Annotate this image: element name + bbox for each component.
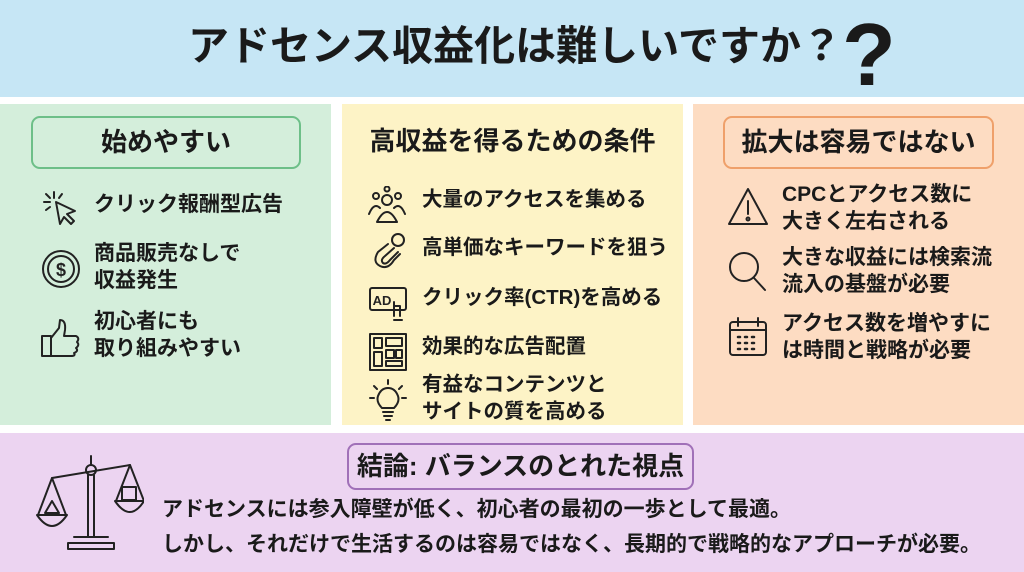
heading: not easy — [723, 116, 994, 169]
heading: easy to start: 始めやすい — [101, 127, 231, 157]
icon: question mark: ? — [842, 5, 896, 104]
text: time and strategy: は時間と戦略が必要 — [782, 339, 971, 362]
icon: people — [368, 186, 406, 223]
icon: warning — [728, 188, 768, 225]
title: アドセンス収益化は難しいですか？ — [188, 23, 842, 69]
text: high price keywords: 高単価なキーワードを狙う — [422, 236, 668, 259]
icon: coin — [42, 250, 80, 288]
text: beginner friendly: 初心者にも — [94, 310, 199, 333]
text: revenue without selling — [94, 242, 240, 292]
text: beginner friendly — [94, 310, 241, 360]
text: time and strategy — [782, 312, 991, 362]
text: much access: 大量のアクセスを集める — [422, 188, 646, 211]
heading: not easy: 拡大は容易ではない — [741, 127, 976, 157]
text: search traffic: 大きな収益には検索流 — [782, 246, 992, 269]
panel: not easy to scale — [693, 104, 1024, 425]
text: CPC — [782, 182, 972, 233]
heading: conclusion: 結論: バランスのとれた視点 — [357, 451, 684, 481]
icon: ad layout — [369, 333, 407, 371]
text: ad placement: 効果的な広告配置 — [422, 335, 586, 358]
icon: AD click: AD — [373, 293, 391, 308]
text: search traffic — [782, 246, 992, 296]
heading: easy to start — [31, 116, 301, 169]
text: revenue without selling: 商品販売なしで — [94, 242, 240, 265]
heading: conditions: 高収益を得るための条件 — [369, 126, 656, 156]
text: CPC: CPCとアクセス数に — [782, 183, 972, 206]
text: CPC: 大きく左右される — [782, 210, 950, 233]
panel: conditions — [342, 104, 683, 425]
text: conclusion body — [162, 498, 981, 556]
text: quality content: サイトの質を高める — [422, 400, 606, 423]
text: quality content: 有益なコンテンツと — [422, 373, 606, 396]
heading: conclusion — [347, 443, 694, 490]
icon: coin: $ — [56, 260, 66, 280]
text: conclusion body: アドセンスには参入障壁が低く、初心者の最初の一歩として最適。 — [162, 498, 791, 521]
icon: magnifier — [729, 252, 766, 291]
icon: lightbulb — [369, 379, 407, 421]
text: conclusion body: しかし、それだけで生活するのは容易ではなく、長期的で戦略的なアプローチが必要。 — [162, 533, 981, 556]
text: CTR: クリック率(CTR)を高める — [422, 286, 662, 309]
text: quality content — [422, 373, 606, 423]
icon: click cursor — [43, 191, 76, 225]
text: beginner friendly: 取り組みやすい — [94, 337, 241, 360]
icon: AD click — [369, 287, 407, 321]
panel: conclusion — [0, 433, 1024, 572]
icon: calendar — [729, 317, 767, 356]
icon: balance scale — [36, 455, 144, 550]
text: revenue without selling: 収益発生 — [94, 269, 178, 292]
icon: magnet — [374, 233, 405, 268]
icon: thumbs up — [41, 319, 80, 357]
panel: easy to start — [0, 104, 331, 425]
title banner — [0, 0, 1024, 97]
text: time and strategy: アクセス数を増やすに — [782, 312, 991, 335]
text: click ads: クリック報酬型広告 — [94, 193, 283, 216]
text: search traffic: 流入の基盤が必要 — [782, 273, 950, 296]
